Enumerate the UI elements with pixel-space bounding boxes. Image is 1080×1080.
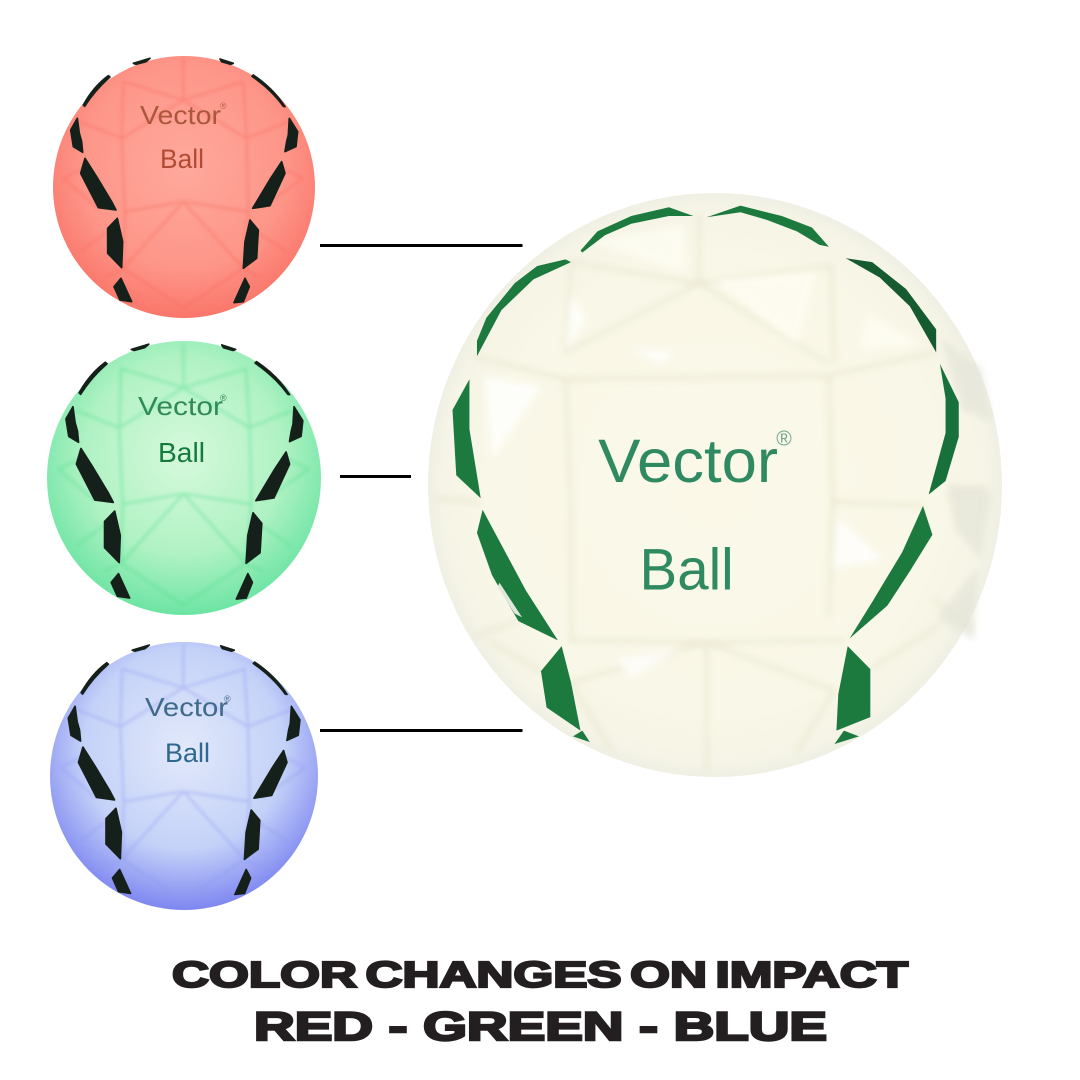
red ball logo text: ® bbox=[220, 101, 227, 111]
large ball logo text: Ball bbox=[640, 538, 734, 603]
blue ball logo text bbox=[145, 692, 231, 768]
large ball logo text bbox=[598, 426, 792, 603]
caption bbox=[172, 954, 908, 1049]
blue ball logo text: ® bbox=[224, 694, 231, 704]
green glowing ball bbox=[47, 341, 321, 615]
blue ball facets and stripes bbox=[61, 645, 306, 900]
green ball logo text: Vector bbox=[138, 391, 223, 421]
green ball logo text bbox=[138, 391, 227, 468]
large ball logo text: ® bbox=[776, 426, 792, 450]
red ball facets and stripes bbox=[63, 58, 303, 308]
connector line: red ball to large ball bbox=[320, 244, 522, 247]
red ball logo text bbox=[140, 100, 227, 174]
blue glowing ball bbox=[50, 642, 318, 910]
blue ball logo text: Ball bbox=[165, 738, 210, 768]
connector line: green ball to large ball bbox=[340, 475, 411, 478]
red ball logo text: Ball bbox=[160, 144, 204, 174]
large ball logo text: Vector bbox=[598, 427, 778, 495]
large ball green stripes bbox=[452, 206, 959, 744]
red ball logo text: Vector bbox=[140, 100, 221, 130]
caption line 2: RED - GREEN - BLUE bbox=[254, 1005, 827, 1049]
blue ball logo text: Vector bbox=[145, 692, 228, 722]
green ball logo text: ® bbox=[220, 393, 227, 403]
caption line 1: COLOR CHANGES ON IMPACT bbox=[172, 954, 908, 995]
large ball facets bbox=[436, 214, 993, 771]
green ball logo text: Ball bbox=[158, 437, 205, 468]
large white ball bbox=[428, 193, 1002, 777]
green ball facets and stripes bbox=[58, 344, 309, 605]
red glowing ball bbox=[53, 56, 315, 318]
connector line: blue ball to large ball bbox=[320, 729, 522, 732]
